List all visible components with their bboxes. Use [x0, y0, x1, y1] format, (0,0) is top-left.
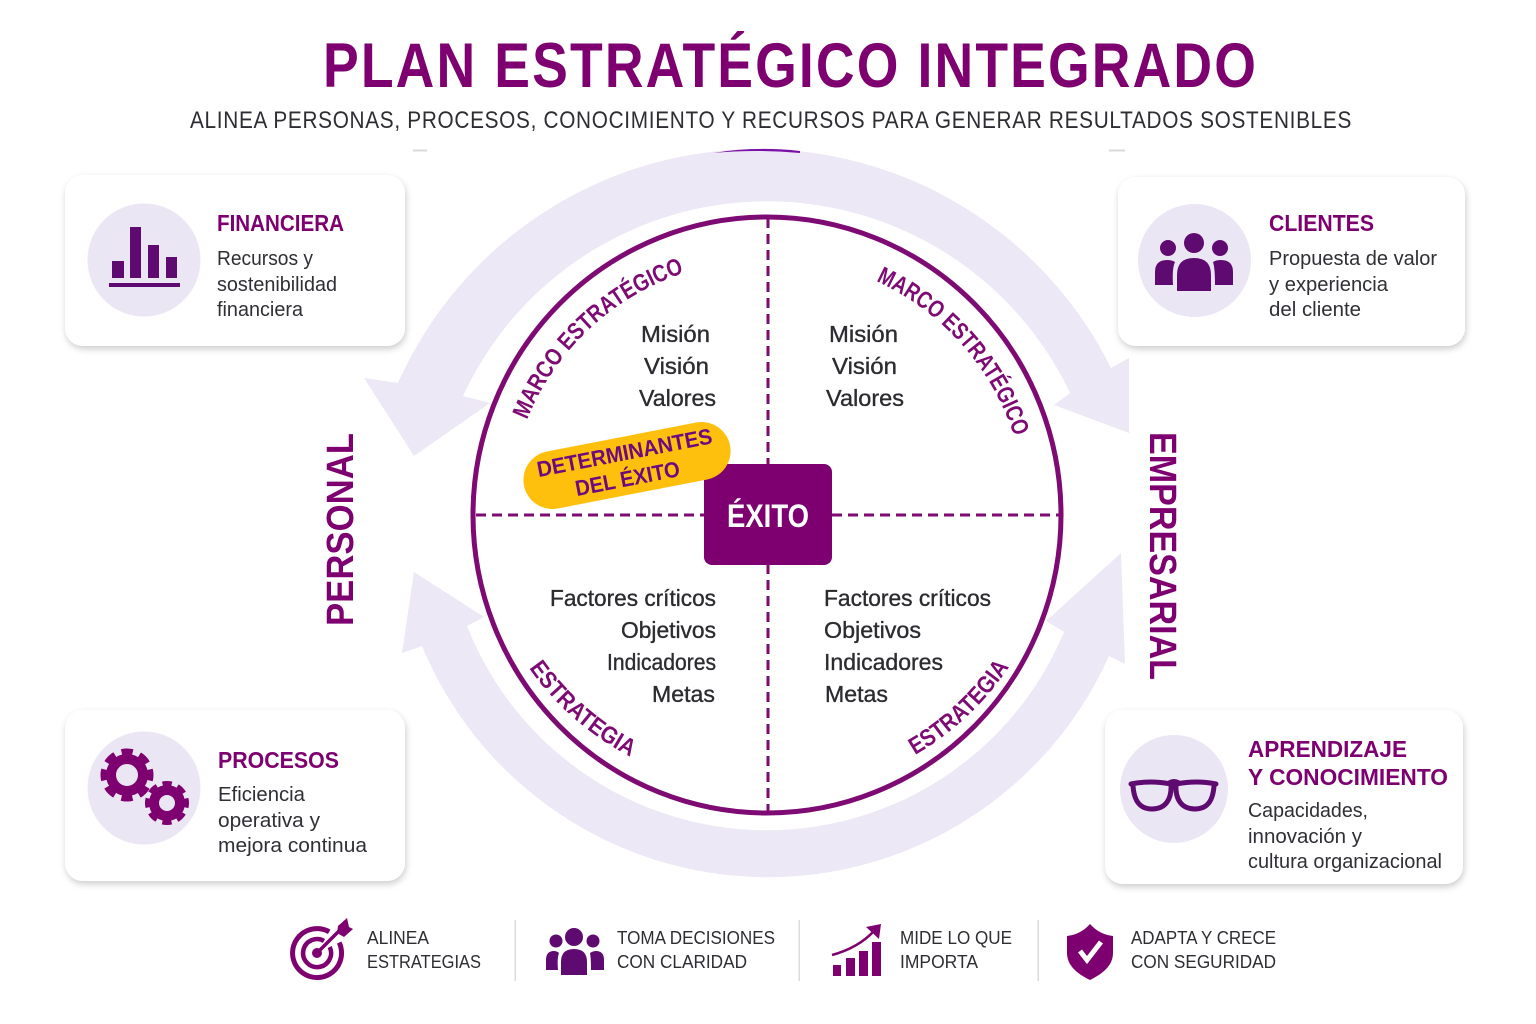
- quadrant text: top left: [639, 321, 716, 411]
- description: financiera: Recursos y: [217, 247, 314, 270]
- label: [900, 928, 1012, 972]
- panel: procesos: [65, 710, 405, 881]
- side label: personal: PERSONAL: [320, 433, 362, 626]
- curved label: marco estratégico right: MARCO ESTRATÉGICO: [877, 266, 1028, 434]
- central circle: [473, 217, 1061, 813]
- label: ALINEA: [367, 928, 429, 948]
- label: CON SEGURIDAD: [1131, 952, 1276, 972]
- label: [1131, 928, 1276, 972]
- icon: growth chart: [832, 924, 881, 976]
- quadrant text: bottom left: Metas: [652, 681, 715, 707]
- description: aprendizaje y conocimiento: [1248, 799, 1442, 873]
- quadrant text: top right: [826, 321, 904, 411]
- badge: determinantes del éxito: DEL ÉXITO: [573, 456, 682, 501]
- panel: financiera: [65, 175, 405, 346]
- arrow: top cycle arc: [364, 149, 1129, 456]
- label: ADAPTA Y CRECE: [1131, 928, 1276, 948]
- label: [617, 928, 775, 972]
- quadrant text: bottom left: Factores críticos: [550, 585, 716, 611]
- badge: determinantes del éxito: [518, 417, 736, 514]
- description: financiera: sostenibilidad: [217, 273, 337, 296]
- description: procesos: operativa y: [218, 809, 321, 832]
- quadrant text: bottom left: [550, 585, 716, 707]
- quadrant text: top left: Visión: [644, 353, 709, 379]
- footer item: mide lo que importa: [832, 924, 1012, 976]
- heading: aprendizaje y conocimiento: APRENDIZAJE: [1248, 736, 1407, 762]
- description: clientes: Propuesta de valor: [1269, 247, 1437, 270]
- title: PLAN ESTRATÉGICO INTEGRADO: [323, 31, 1258, 101]
- label: CON CLARIDAD: [617, 952, 747, 972]
- quadrant text: bottom right: [824, 585, 991, 707]
- panel: aprendizaje y conocimiento: [1105, 710, 1463, 884]
- center box: éxito: [704, 464, 832, 565]
- description: clientes: [1269, 247, 1437, 321]
- description: aprendizaje y conocimiento: Capacidades,: [1248, 799, 1368, 822]
- heading: procesos: PROCESOS: [218, 747, 339, 773]
- quadrant text: bottom left: Indicadores: [607, 649, 716, 675]
- quadrant text: top right: Valores: [826, 385, 904, 411]
- icon: target: [293, 918, 353, 978]
- footer item: toma decisiones: [546, 928, 775, 975]
- center box: éxito: ÉXITO: [727, 498, 809, 534]
- curved label: estrategia left: ESTRATEGIA: [530, 659, 634, 756]
- icon: people: [1155, 233, 1233, 291]
- footer item: adapta y crece: [1067, 924, 1276, 980]
- description: financiera: [217, 247, 337, 321]
- quadrant text: top right: Visión: [832, 353, 897, 379]
- side label: empresarial: EMPRESARIAL: [1141, 432, 1183, 680]
- quadrant text: bottom right: Objetivos: [824, 617, 921, 643]
- description: clientes: y experiencia: [1269, 273, 1389, 296]
- description: aprendizaje y conocimiento: cultura organizacional: [1248, 850, 1442, 873]
- quadrant text: top left: Valores: [639, 385, 716, 411]
- description: aprendizaje y conocimiento: innovación y: [1248, 825, 1363, 848]
- quadrant text: top right: Misión: [829, 321, 898, 347]
- quadrant text: bottom right: Metas: [825, 681, 888, 707]
- footer item: alinea estrategias: [293, 918, 481, 978]
- subtitle: ALINEA PERSONAS, PROCESOS, CONOCIMIENTO Y RECURSOS PARA GENERAR RESULTADOS SOSTENIBLES: [190, 107, 1352, 134]
- description: financiera: financiera: [217, 298, 304, 321]
- heading: aprendizaje y conocimiento: Y CONOCIMIENTO: [1248, 764, 1448, 790]
- arrow: bottom cycle arc: [402, 553, 1125, 877]
- panel: clientes: [1118, 177, 1465, 346]
- label: IMPORTA: [900, 952, 978, 972]
- label: ESTRATEGIAS: [367, 952, 481, 972]
- label: TOMA DECISIONES: [617, 928, 775, 948]
- icon: bar chart: [109, 227, 180, 287]
- label: MIDE LO QUE: [900, 928, 1012, 948]
- heading: financiera: FINANCIERA: [217, 210, 344, 236]
- quadrant text: bottom right: Indicadores: [824, 649, 943, 675]
- badge: determinantes del éxito: DETERMINANTES: [535, 423, 714, 482]
- label: [367, 928, 481, 972]
- curved label: estrategia right: ESTRATEGIA: [908, 662, 1009, 754]
- description: procesos: [218, 783, 368, 857]
- icon: shield: [1067, 924, 1113, 980]
- description: procesos: mejora continua: [218, 834, 368, 857]
- heading: aprendizaje y conocimiento: [1248, 736, 1448, 790]
- icon: people: [546, 928, 604, 975]
- description: procesos: Eficiencia: [218, 783, 306, 806]
- curved label: marco estratégico left: MARCO ESTRATÉGICO: [512, 259, 682, 419]
- icon: glasses: [1131, 782, 1216, 809]
- heading: clientes: CLIENTES: [1269, 210, 1374, 236]
- icon: gears: [99, 747, 190, 826]
- quadrant text: bottom left: Objetivos: [621, 617, 716, 643]
- quadrant text: bottom right: Factores críticos: [824, 585, 991, 611]
- quadrant text: top left: Misión: [641, 321, 710, 347]
- description: clientes: del cliente: [1269, 298, 1361, 321]
